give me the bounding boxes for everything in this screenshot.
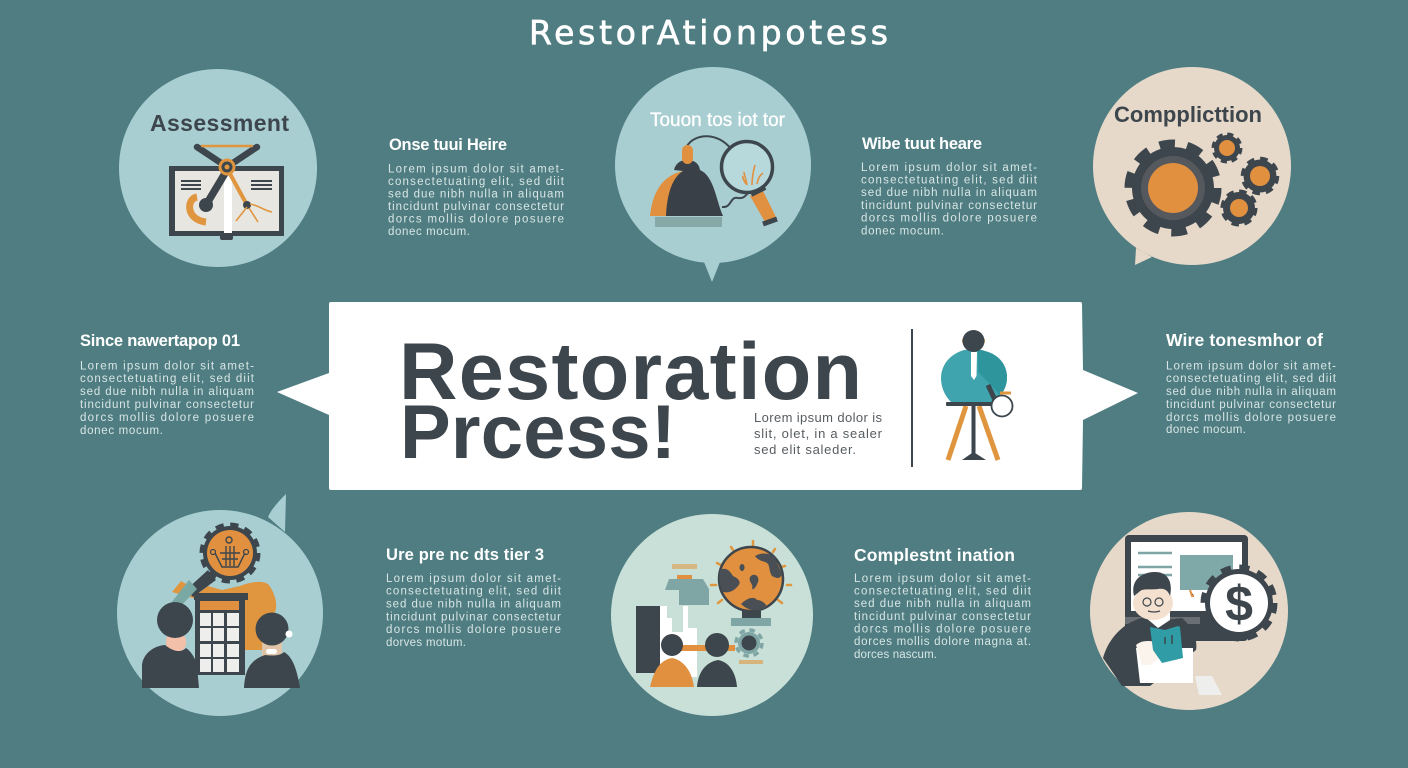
text block: three: dorves motum. <box>386 637 466 649</box>
text block: right <box>1166 330 1337 436</box>
text block: one: tincidunt pulvinar consectetur <box>388 201 564 213</box>
icon: accountant at monitor with dollar gear: $ <box>1225 576 1253 632</box>
banner caption: slit, olet, in a sealer <box>754 426 883 441</box>
panel: completion speech bubble <box>1093 67 1291 265</box>
text block: two: donec mocum. <box>861 226 944 238</box>
panel: assessment circle <box>119 69 317 267</box>
icon: globe with team <box>636 541 791 687</box>
text block: right: sed due nibh nulla in aliquam <box>1166 386 1336 398</box>
text block: three: consectetuating elit, sed diit <box>386 586 562 598</box>
panel: inspection speech bubble <box>615 67 811 282</box>
completion heading: Compplicttion <box>1114 102 1262 127</box>
icon: accountant at monitor with dollar gear <box>1103 535 1274 695</box>
text block: two: dorcs mollis dolore posuere <box>861 212 1037 224</box>
text block: four: dorces mollis dolore magna at. <box>854 636 1031 648</box>
panel: finance circle <box>1090 512 1288 710</box>
icon: gears <box>1129 134 1277 232</box>
text block: four: sed due nibh nulla in aliquam <box>854 598 1031 610</box>
panel: research circle <box>611 514 813 716</box>
text block: four: dorces nascum. <box>854 649 937 661</box>
banner title <box>399 327 862 475</box>
banner caption <box>754 410 883 457</box>
panel: planning speech bubble <box>117 494 323 716</box>
text block: three: tincidunt pulvinar consectetur <box>386 612 561 624</box>
text block: one <box>388 136 565 238</box>
text block: right: consectetuating elit, sed diit <box>1166 373 1337 385</box>
banner title: Prcess! <box>400 390 676 475</box>
text block: four: consectetuating elit, sed diit <box>854 586 1032 598</box>
banner caption: sed elit saleder. <box>754 442 856 457</box>
text block: two: consectetuating elit, sed diit <box>861 174 1038 186</box>
text block: one: consectetuating elit, sed diit <box>388 176 565 188</box>
text block: two: tincidunt pulvinar consectetur <box>861 200 1037 212</box>
text block: two: Wibe tuut heare <box>862 135 982 153</box>
text block: four: Lorem ipsum dolor sit amet- <box>854 573 1031 585</box>
text block: one: donec mocum. <box>388 226 470 238</box>
icon: seated figure <box>941 330 1012 460</box>
inspection heading: Touon tos iot tor <box>650 110 786 131</box>
text block: right: dorcs mollis dolore posuere <box>1166 412 1336 424</box>
text block: four: tincidunt pulvinar consectetur <box>854 611 1031 623</box>
text block: one: Onse tuui Heire <box>389 136 507 154</box>
text block: left: Since nawertapop 01 <box>80 332 240 350</box>
text block: two: Lorem ipsum dolor sit amet- <box>861 162 1037 174</box>
panel: central banner <box>277 302 1138 490</box>
text block: two <box>861 135 1038 238</box>
text block: left <box>80 332 255 437</box>
text block: left: tincidunt pulvinar consectetur <box>80 399 254 411</box>
icon: bell and magnifier <box>650 136 777 227</box>
text block: right: donec mocum. <box>1166 424 1246 436</box>
text block: right: Lorem ipsum dolor sit amet- <box>1166 360 1336 372</box>
text block: left: sed due nibh nulla in aliquam <box>80 386 254 398</box>
assessment heading: Assessment <box>150 110 289 136</box>
text block: left: consectetuating elit, sed diit <box>80 373 255 385</box>
text block: right: tincidunt pulvinar consectetur <box>1166 399 1336 411</box>
text block: three: sed due nibh nulla in aliquam <box>386 598 561 610</box>
text block: three: Lorem ipsum dolor sit amet- <box>386 573 561 585</box>
text block: left: donec mocum. <box>80 425 163 437</box>
text block: four: dorcs mollis dolore posuere <box>854 624 1031 636</box>
icon: book with compass <box>169 146 284 240</box>
title: RestorAtionpotess <box>529 13 888 52</box>
icon: team with calculator and gear <box>142 526 300 688</box>
text block: four <box>854 545 1032 661</box>
text block: left: dorcs mollis dolore posuere <box>80 412 254 424</box>
text block: four: Complestnt ination <box>854 545 1015 565</box>
text block: one: dorcs mollis dolore posuere <box>388 214 564 226</box>
text block: two: sed due nibh nulla in aliquam <box>861 187 1037 199</box>
text block: three <box>386 546 562 649</box>
text block: right: Wire tonesmhor of <box>1166 330 1323 350</box>
text block: left: Lorem ipsum dolor sit amet- <box>80 360 254 372</box>
text block: one: Lorem ipsum dolor sit amet- <box>388 164 564 176</box>
text block: one: sed due nibh nulla in aliquam <box>388 188 564 200</box>
banner title: Restoration <box>399 327 862 417</box>
text block: three: dorcs mollis dolore posuere <box>386 624 561 636</box>
text block: three: Ure pre nc dts tier 3 <box>386 546 544 564</box>
banner caption: Lorem ipsum dolor is <box>754 410 882 425</box>
